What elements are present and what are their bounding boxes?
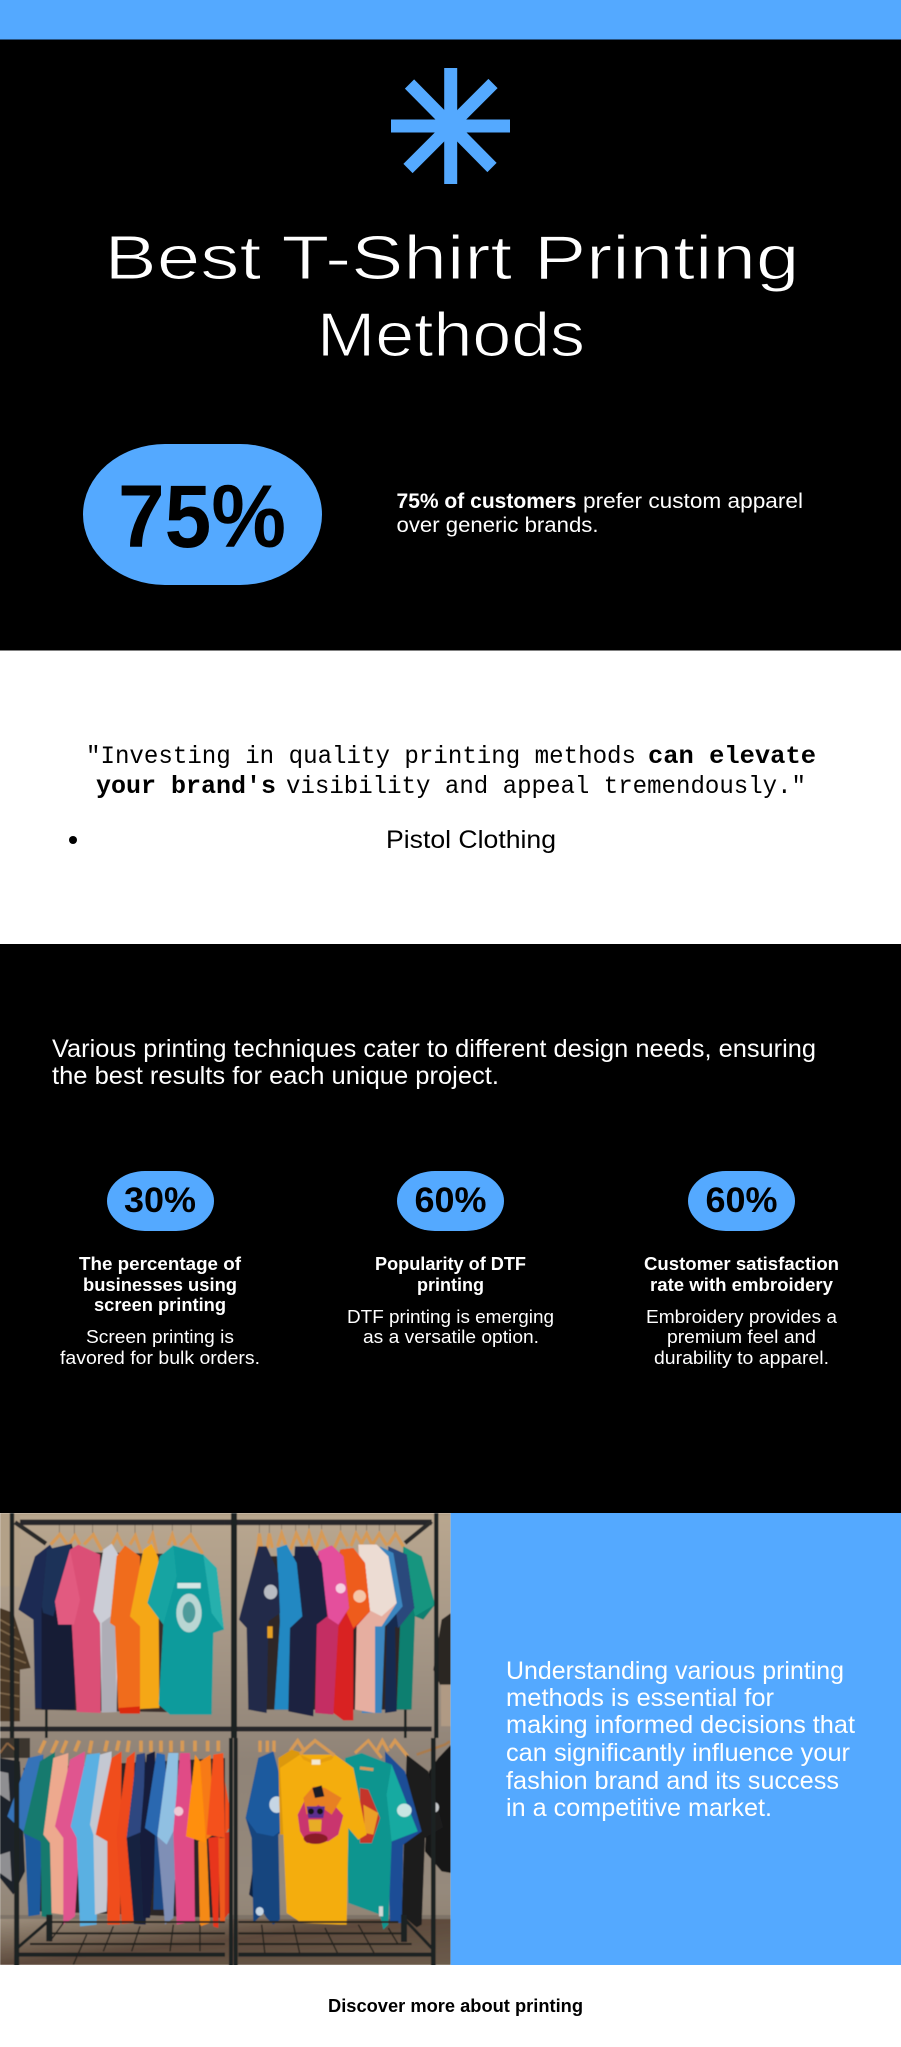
title: [104, 224, 800, 370]
stat description: over generic brands.: [396, 513, 598, 537]
body: [646, 1307, 838, 1368]
bullet: [69, 836, 77, 844]
stat pill: 60%: [397, 1171, 504, 1231]
stat column: screen printing: [60, 1171, 260, 1368]
conclusion text: methods is essential for: [506, 1684, 774, 1712]
rack bottom right with shirts: [225, 1738, 451, 1966]
title: Best T-Shirt Printing: [104, 224, 800, 293]
rack bottom left with shirts: [0, 1738, 225, 1968]
quote text: visibility and appeal tremendously.": [286, 772, 806, 801]
quote text: can elevate: [648, 742, 816, 771]
heading: The percentage of: [79, 1254, 242, 1274]
body: DTF printing is emerging: [347, 1307, 554, 1327]
conclusion text: in a competitive market.: [506, 1794, 772, 1822]
stat description: 75% of customers: [396, 489, 577, 513]
panel: techniques: [0, 944, 901, 1513]
conclusion text: can significantly influence your: [506, 1739, 850, 1767]
heading: screen printing: [94, 1295, 226, 1315]
heading: printing: [417, 1275, 484, 1295]
panel: quote: [0, 651, 901, 944]
body: [347, 1307, 554, 1347]
body: as a versatile option.: [363, 1327, 539, 1347]
stat pill: 60%: 60%: [706, 1181, 778, 1220]
stat pill: 30%: 30%: [124, 1181, 196, 1220]
quote text: [86, 742, 816, 801]
conclusion text: [506, 1657, 855, 1822]
panel: hero: [0, 40, 901, 650]
photo: t-shirts on racks: [0, 1513, 451, 1968]
stat description: prefer custom apparel: [583, 489, 803, 513]
intro text: [52, 1035, 816, 1090]
stat pill: 60%: 60%: [414, 1181, 486, 1220]
heading: businesses using: [83, 1275, 237, 1295]
stat description: [396, 489, 803, 537]
conclusion text: fashion brand and its success: [506, 1767, 839, 1795]
body: Embroidery provides a: [646, 1307, 838, 1327]
stat column: DTF printing: [347, 1171, 554, 1347]
heading: [375, 1254, 526, 1295]
shirt graphic: [298, 1785, 343, 1844]
stat column: embroidery: [644, 1171, 839, 1368]
title: Methods: [317, 301, 585, 370]
icon: asterisk: [391, 68, 510, 184]
body: premium feel and: [667, 1327, 816, 1347]
top accent bar: [0, 0, 901, 40]
conclusion text: Understanding various printing: [506, 1657, 844, 1685]
stat pill: 75%: [83, 444, 322, 585]
heading: [644, 1254, 839, 1295]
body: Screen printing is: [86, 1327, 234, 1347]
stat pill: 75%: 75%: [118, 466, 286, 566]
heading: Popularity of DTF: [375, 1254, 526, 1274]
heading: [79, 1254, 242, 1315]
conclusion text: making informed decisions that: [506, 1711, 855, 1739]
stat pill: 60%: [688, 1171, 795, 1231]
panel: conclusion: [451, 1513, 901, 1965]
rack top right with shirts: [225, 1513, 451, 1738]
heading: rate with embroidery: [650, 1275, 833, 1295]
intro text: Various printing techniques cater to different design needs, ensuring: [52, 1035, 816, 1063]
stat pill: 30%: [107, 1171, 214, 1231]
quote attribution: Pistol Clothing: [386, 826, 556, 854]
body: durability to apparel.: [654, 1348, 829, 1368]
body: favored for bulk orders.: [60, 1348, 260, 1368]
heading: Customer satisfaction: [644, 1254, 839, 1274]
body: [60, 1327, 260, 1368]
quote text: "Investing in quality printing methods: [86, 742, 636, 771]
intro text: the best results for each unique project.: [52, 1062, 499, 1090]
quote text: your brand's: [96, 772, 276, 801]
rack top left with shirts: [0, 1513, 225, 1738]
footer link text: Discover more about printing: [328, 1996, 583, 2016]
